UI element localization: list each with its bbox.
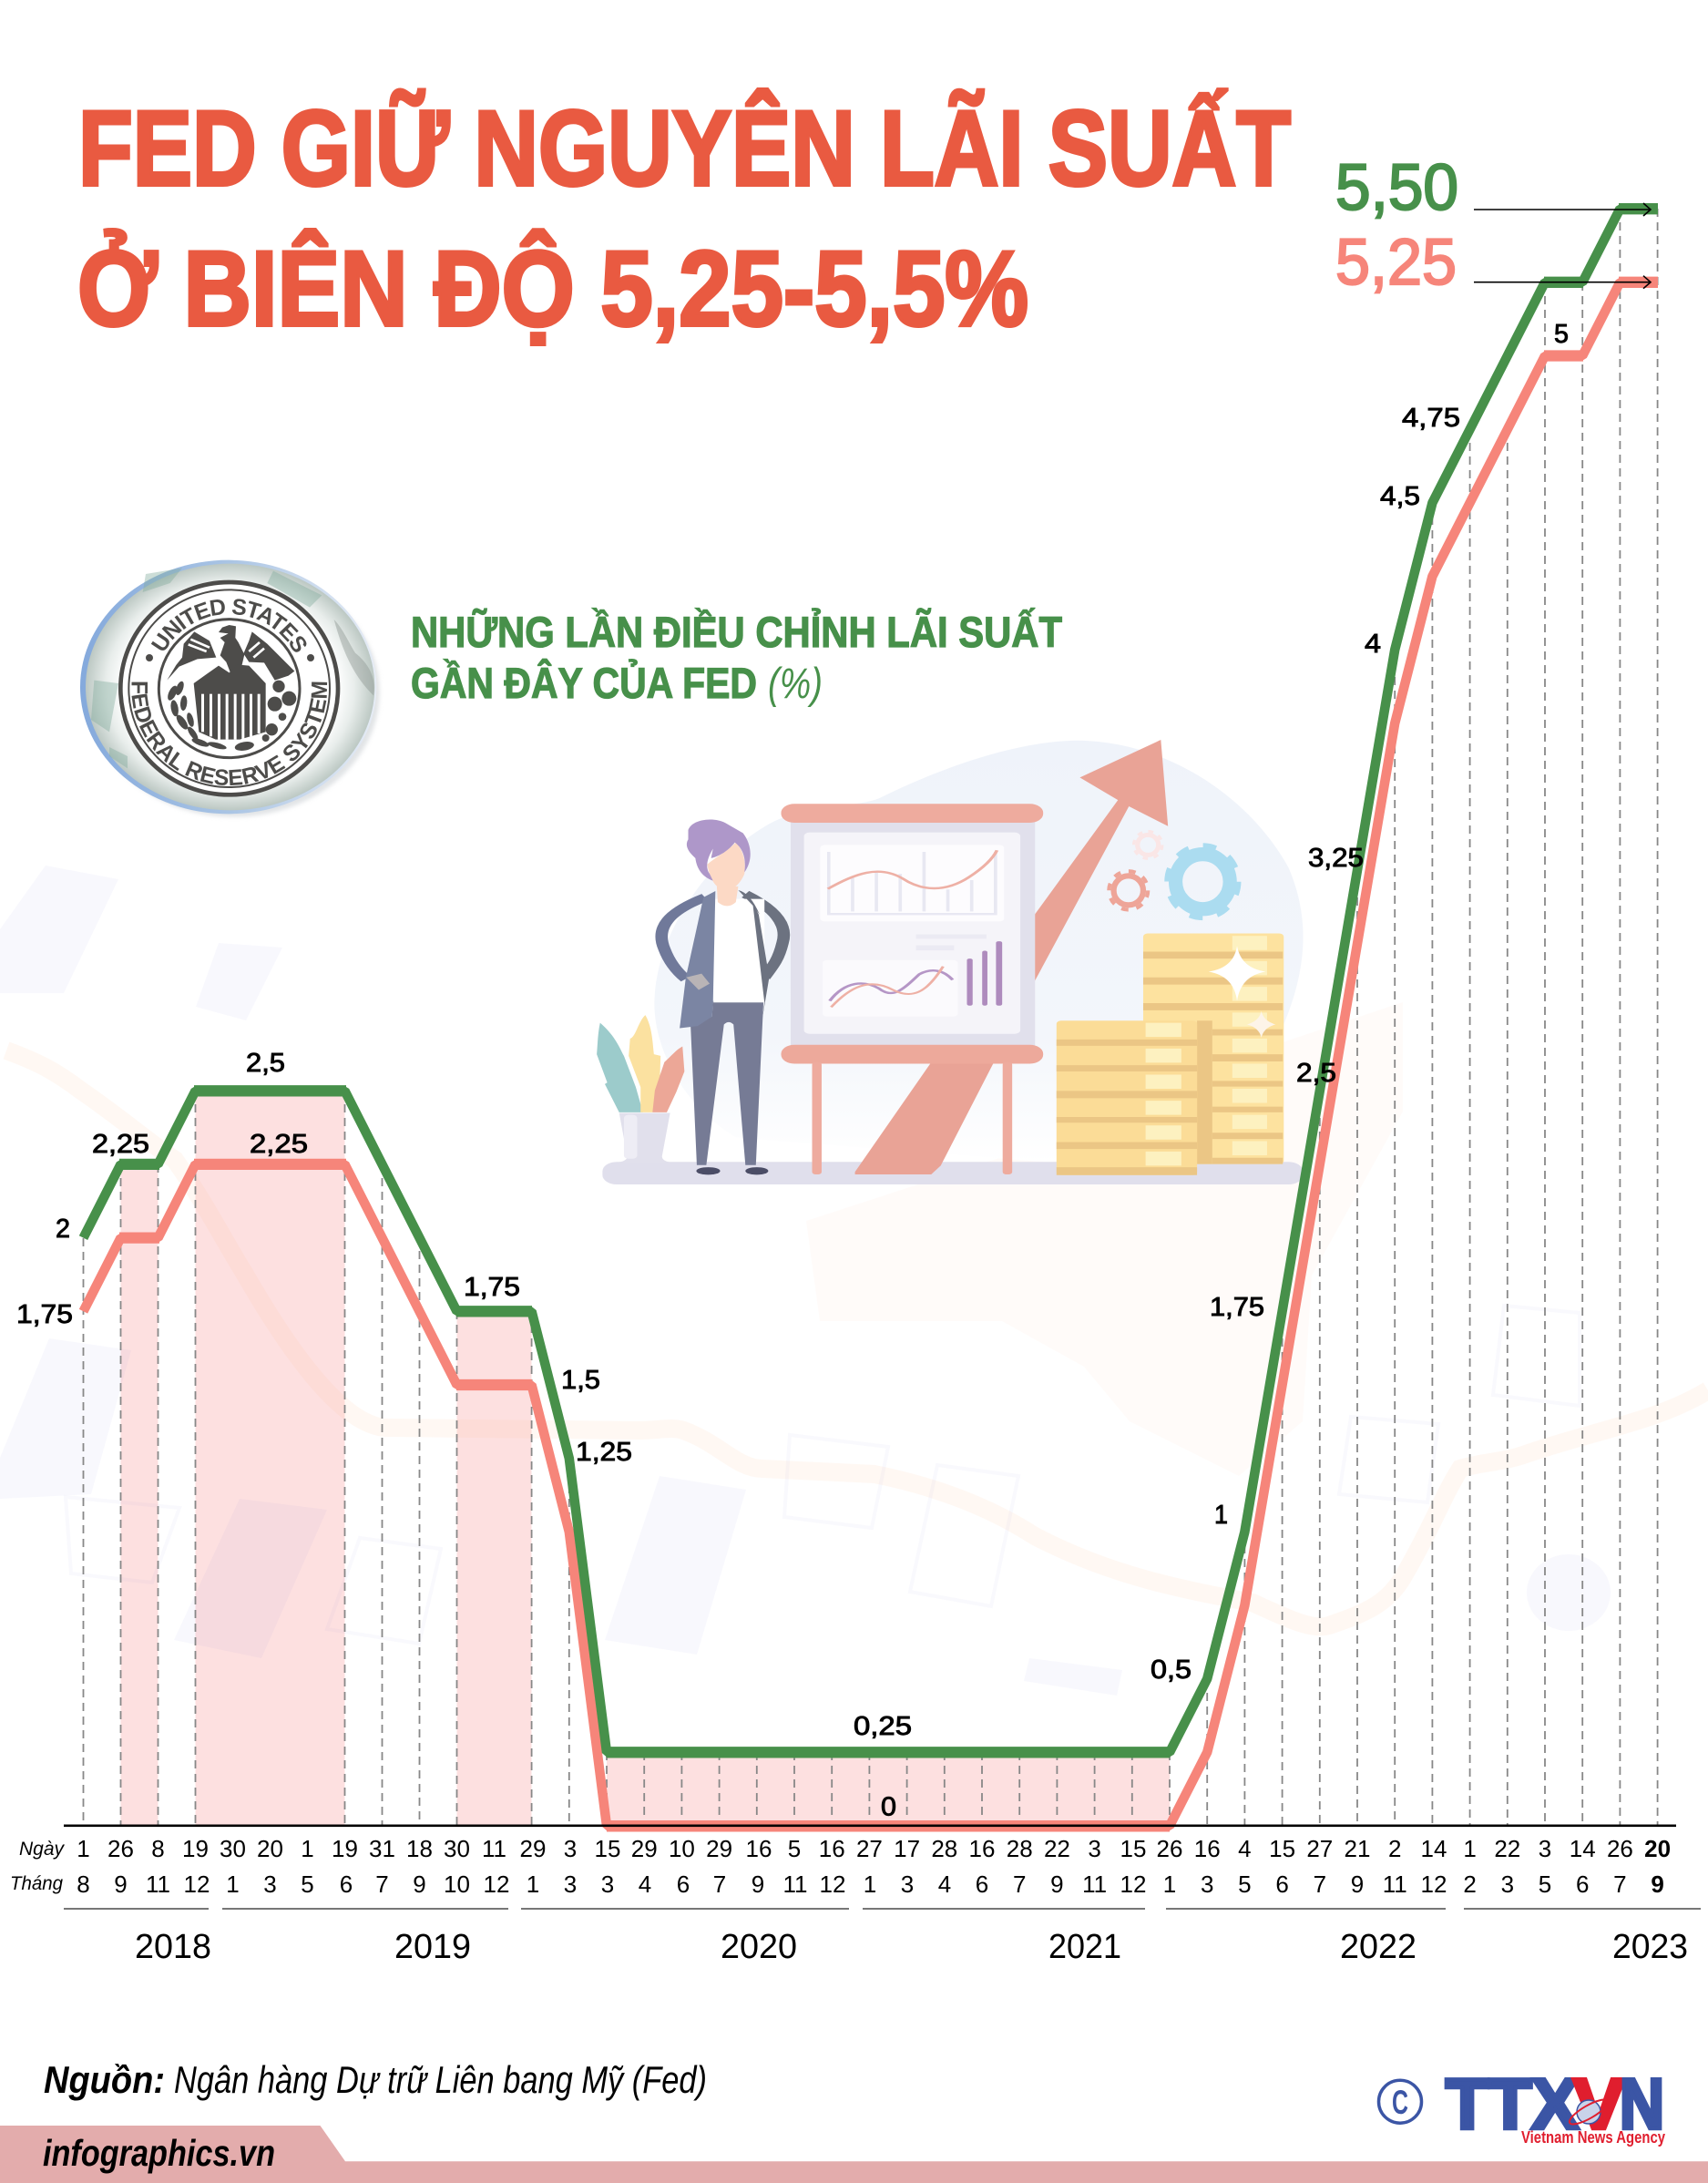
olive branch and oak leaves xyxy=(166,681,296,752)
axis: month row: 3 xyxy=(1201,1870,1213,1898)
axis: day row: 22 xyxy=(1494,1835,1520,1862)
axis: day row: 27 xyxy=(856,1835,883,1862)
rate value labels: 4,75 xyxy=(1402,404,1460,433)
TTXVN logo: N xyxy=(1620,2064,1664,2144)
axis: day row: 30 xyxy=(444,1835,470,1862)
axis: day row: 10 xyxy=(669,1835,695,1862)
axis: day row: 16 xyxy=(746,1835,772,1862)
axis: month row: 9 xyxy=(114,1870,128,1898)
rate value labels: 1,75 xyxy=(1210,1293,1264,1322)
axis: month row: 4 xyxy=(639,1870,651,1898)
axis: month row: 11 xyxy=(1082,1870,1107,1898)
axis: month row: 6 xyxy=(1576,1870,1589,1898)
seal lettering: FEDERAL RESERVE SYSTEM xyxy=(131,682,328,785)
rate value labels: 2,25 xyxy=(250,1130,308,1159)
axis: month row: 12 xyxy=(1421,1870,1447,1898)
axis: month row: 11 xyxy=(1383,1870,1407,1898)
year labels: 2021 xyxy=(1048,1928,1121,1966)
rate value labels: 1 xyxy=(1214,1501,1228,1530)
rate value labels: 1,75 xyxy=(16,1300,73,1329)
chart heading xyxy=(411,608,1062,707)
axis: day row: 3 xyxy=(1539,1835,1551,1862)
seal lettering: UNITED STATES xyxy=(151,599,306,652)
TTXVN logo xyxy=(1446,2064,1665,2147)
axis: month row: 6 xyxy=(677,1870,690,1898)
axis: month row: 7 xyxy=(713,1870,726,1898)
axis: day row: 20 xyxy=(1644,1835,1671,1862)
axis: day row: 28 xyxy=(931,1835,957,1862)
axis: day row: 1 xyxy=(1463,1835,1477,1862)
axis: month row: 7 xyxy=(1013,1870,1026,1898)
axis: day row: 16 xyxy=(1194,1835,1221,1862)
axis: day row: 18 xyxy=(406,1835,433,1862)
axis row captions: Ngày xyxy=(19,1839,65,1860)
axis: month row: 12 xyxy=(820,1870,845,1898)
axis: month row: 5 xyxy=(1539,1870,1551,1898)
title: Ở BIÊN ĐỘ 5,25-5,5% xyxy=(77,229,1028,348)
footer site name: infographics.vn xyxy=(43,2132,275,2174)
axis: day row: 21 xyxy=(1345,1835,1370,1862)
rate value labels xyxy=(16,320,1569,1822)
axis: day row: 3 xyxy=(564,1835,577,1862)
axis: month row: 9 xyxy=(413,1870,426,1898)
axis: day row: 8 xyxy=(151,1835,165,1862)
TTXVN logo: V xyxy=(1573,2064,1624,2144)
axis: day row: 20 xyxy=(257,1835,283,1862)
year labels: 2019 xyxy=(394,1928,471,1966)
axis: month row: 11 xyxy=(146,1870,170,1898)
shaded periods xyxy=(120,1091,1170,1826)
chart heading: (%) xyxy=(768,659,823,707)
year labels: 2018 xyxy=(135,1928,211,1966)
copyright mark xyxy=(1379,2080,1421,2123)
floor xyxy=(602,1162,1303,1184)
axis: day row: 14 xyxy=(1570,1835,1596,1862)
rate value labels: 2 xyxy=(56,1214,70,1244)
year labels: 2020 xyxy=(721,1928,797,1966)
source note xyxy=(44,2058,707,2101)
copyright mark: C xyxy=(1392,2084,1408,2121)
axis: month row: 3 xyxy=(901,1870,914,1898)
chart heading: NHỮNG LẦN ĐIỀU CHỈNH LÃI SUẤT xyxy=(411,608,1062,656)
axis: day row: 22 xyxy=(1044,1835,1070,1862)
coin stacks xyxy=(1057,934,1284,1175)
axis: day row: 14 xyxy=(1421,1835,1447,1862)
axis: day row: 3 xyxy=(1088,1835,1101,1862)
axis: day row: 1 xyxy=(301,1835,314,1862)
rate value labels: 4 xyxy=(1365,630,1381,659)
axis: month row: 6 xyxy=(340,1870,353,1898)
axis: month row: 9 xyxy=(752,1870,764,1898)
Federal Reserve seal xyxy=(80,559,381,818)
axis: month row: 1 xyxy=(527,1870,539,1898)
axis: day row: 17 xyxy=(894,1835,920,1862)
title: FED GIỮ NGUYÊN LÃI SUẤT xyxy=(78,88,1291,208)
seal eagle and shield xyxy=(166,625,296,752)
axis row captions: Tháng xyxy=(10,1873,63,1894)
year brackets xyxy=(64,1908,1701,1910)
axis: month row: 5 xyxy=(1238,1870,1252,1898)
rate value labels: 0,25 xyxy=(854,1712,912,1741)
axis: day row: 4 xyxy=(1238,1835,1252,1862)
axis: day row: 29 xyxy=(706,1835,732,1862)
latest value: 5,50: 5,50 xyxy=(1335,152,1458,224)
axis: day row: 16 xyxy=(969,1835,995,1862)
axis: day row: 26 xyxy=(1607,1835,1633,1862)
TTXVN logo: TTX xyxy=(1446,2064,1579,2144)
TTXVN logo: Vietnam News Agency xyxy=(1521,2128,1665,2147)
rate value labels: 1,25 xyxy=(576,1438,632,1467)
rate value labels: 5 xyxy=(1554,320,1569,349)
presenter xyxy=(661,819,783,1174)
latest value arrows xyxy=(1474,203,1651,289)
source note: Nguồn: xyxy=(44,2058,165,2101)
year labels xyxy=(135,1928,1688,1966)
axis: month row: 12 xyxy=(184,1870,210,1898)
axis: month row: 1 xyxy=(1163,1870,1176,1898)
axis: month row: 1 xyxy=(864,1870,876,1898)
source note: Ngân hàng Dự trữ Liên bang Mỹ (Fed) xyxy=(174,2058,707,2101)
axis: month row: 5 xyxy=(301,1870,314,1898)
axis: day row: 5 xyxy=(788,1835,801,1862)
axis: month row: 9 xyxy=(1651,1870,1664,1898)
axis: month row: 8 xyxy=(77,1870,90,1898)
axis: day row: 29 xyxy=(520,1835,546,1862)
rate value labels: 2,25 xyxy=(92,1130,149,1159)
axis: day row: 31 xyxy=(369,1835,395,1862)
axis: month row: 12 xyxy=(484,1870,509,1898)
axis: day row xyxy=(77,1835,1671,1862)
axis: day row: 26 xyxy=(107,1835,134,1862)
axis: month row: 7 xyxy=(1314,1870,1326,1898)
rate value labels: 2,5 xyxy=(246,1049,285,1078)
dashed date guides xyxy=(84,209,1658,1826)
rising arrow xyxy=(855,740,1168,1174)
axis: day row: 28 xyxy=(1007,1835,1033,1862)
year labels: 2022 xyxy=(1340,1928,1417,1966)
axis: month row: 4 xyxy=(938,1870,951,1898)
axis: month row: 1 xyxy=(226,1870,240,1898)
axis: day row: 1 xyxy=(77,1835,90,1862)
axis: day row: 19 xyxy=(182,1835,209,1862)
axis: day row: 16 xyxy=(819,1835,845,1862)
rate value labels: 4,5 xyxy=(1380,482,1420,511)
axis: day row: 26 xyxy=(1157,1835,1182,1862)
axis: day row: 29 xyxy=(631,1835,658,1862)
axis: day row: 27 xyxy=(1306,1835,1333,1862)
axis: month row: 3 xyxy=(263,1870,277,1898)
axis: day row: 11 xyxy=(482,1835,506,1862)
axis: month row xyxy=(77,1870,1664,1898)
axis: month row: 6 xyxy=(1275,1870,1289,1898)
axis: month row: 9 xyxy=(1351,1870,1364,1898)
axis: month row: 3 xyxy=(564,1870,577,1898)
rate value labels: 2,5 xyxy=(1296,1059,1336,1088)
background watermark: candlesticks and trend line xyxy=(0,866,1708,1696)
rate value labels: 1,5 xyxy=(561,1366,600,1395)
x axis xyxy=(64,1824,1676,1827)
axis: day row: 15 xyxy=(1120,1835,1146,1862)
lower bound line (red) xyxy=(84,282,1658,1831)
rate value labels: 0 xyxy=(881,1793,896,1822)
axis: month row: 11 xyxy=(783,1870,807,1898)
plant in pot xyxy=(597,1015,684,1163)
chart heading: GẦN ĐÂY CỦA FED xyxy=(411,659,757,707)
rate value labels: 1,75 xyxy=(464,1273,520,1302)
illustration: presenter, chart board, rising arrow and coins xyxy=(597,740,1304,1184)
axis: month row: 2 xyxy=(1463,1870,1477,1898)
axis: day row: 19 xyxy=(332,1835,358,1862)
axis: day row: 15 xyxy=(595,1835,620,1862)
presentation board xyxy=(782,804,1043,1174)
footer band xyxy=(0,2126,1708,2183)
axis: month row: 12 xyxy=(1120,1870,1146,1898)
axis: day row: 2 xyxy=(1388,1835,1401,1862)
axis: month row: 3 xyxy=(1501,1870,1514,1898)
upper bound line (green) xyxy=(84,209,1658,1752)
axis row captions xyxy=(10,1839,65,1894)
gears xyxy=(1109,831,1239,917)
axis: month row: 10 xyxy=(444,1870,470,1898)
rate value labels: 0,5 xyxy=(1151,1655,1192,1685)
axis: month row: 6 xyxy=(976,1870,988,1898)
illustration backdrop blob xyxy=(654,741,1304,1163)
axis: month row: 3 xyxy=(601,1870,614,1898)
axis: day row: 15 xyxy=(1269,1835,1295,1862)
rate value labels: 3,25 xyxy=(1308,844,1364,873)
year labels: 2023 xyxy=(1612,1928,1688,1966)
axis: month row: 9 xyxy=(1050,1870,1064,1898)
axis: day row: 30 xyxy=(220,1835,246,1862)
seal lettering xyxy=(131,599,328,785)
latest value: 5,25: 5,25 xyxy=(1335,227,1457,299)
title xyxy=(77,88,1291,348)
axis: month row: 7 xyxy=(1613,1870,1627,1898)
axis: month row: 7 xyxy=(375,1870,389,1898)
